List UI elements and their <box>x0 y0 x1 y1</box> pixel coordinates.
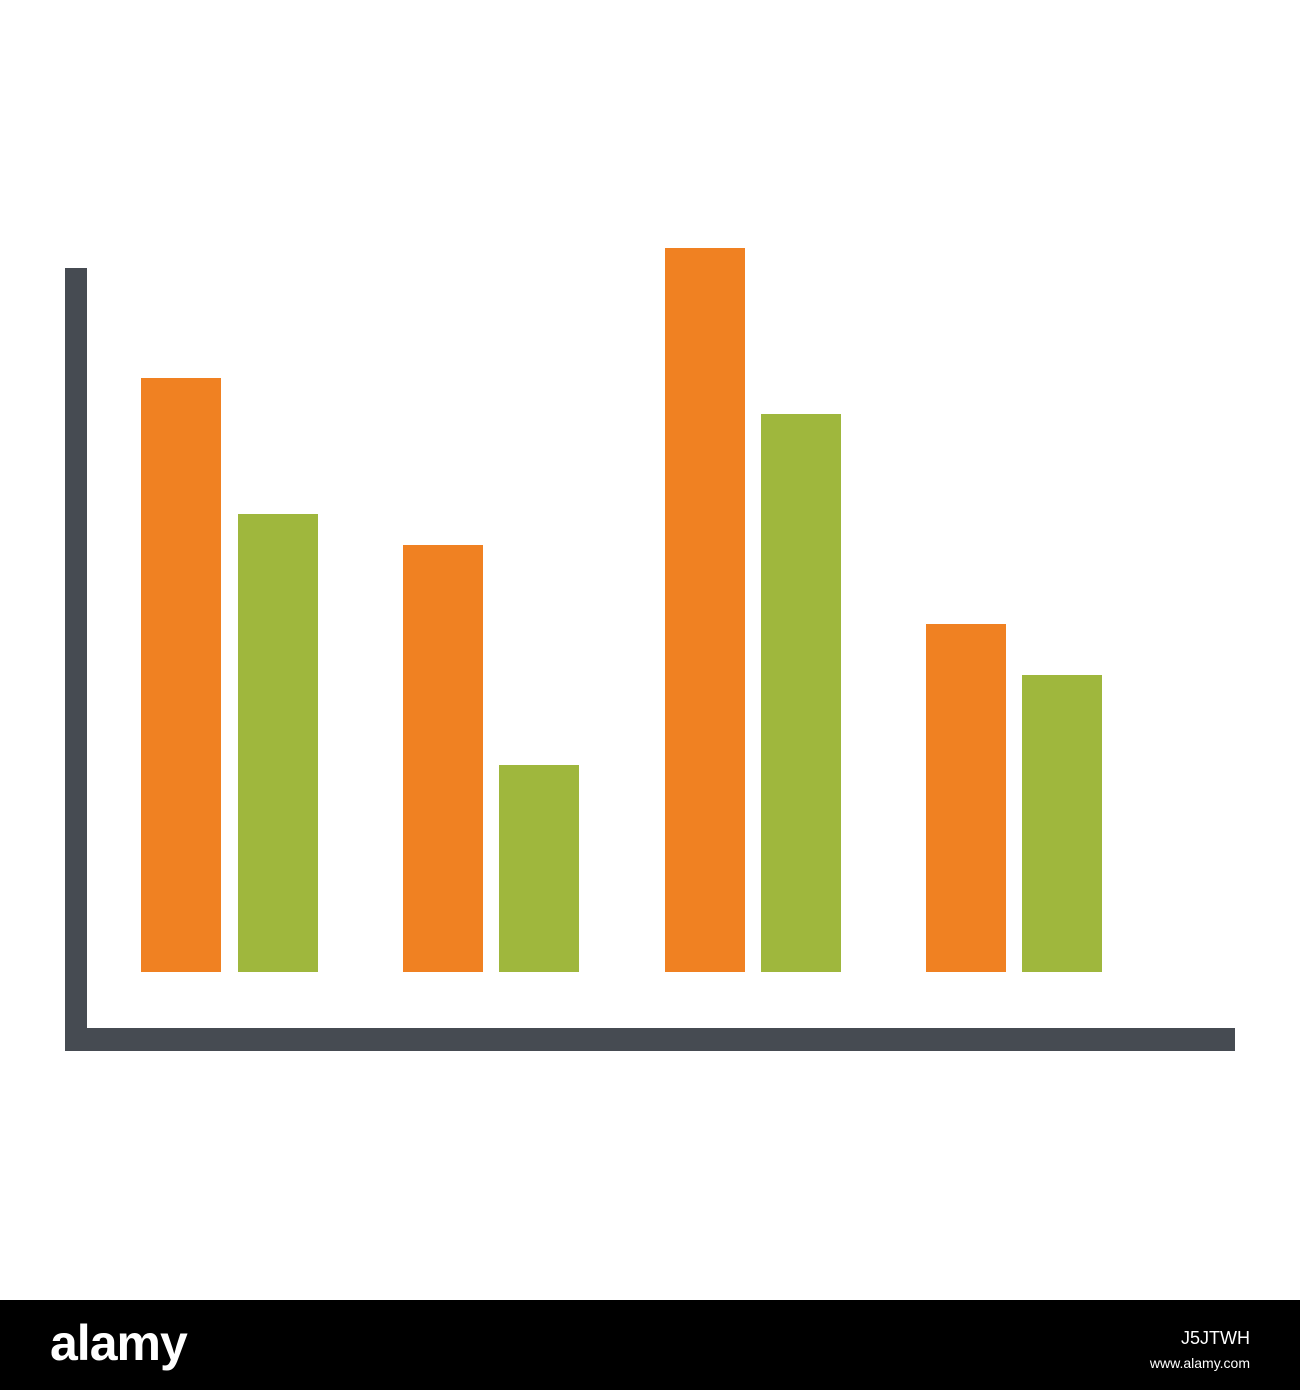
footer image id: J5JTWH <box>1181 1328 1250 1348</box>
footer logo text: alamy <box>50 1315 187 1371</box>
footer bar <box>0 1300 1300 1390</box>
bar: group 4 orange <box>926 624 1006 972</box>
bar: group 3 green <box>761 414 841 972</box>
footer image id <box>1150 1328 1250 1371</box>
bar: group 1 green <box>238 514 318 972</box>
footer image id: www.alamy.com <box>1150 1355 1250 1371</box>
bar chart <box>65 248 1235 1051</box>
x axis <box>65 1028 1235 1051</box>
y axis <box>65 268 87 1051</box>
bar: group 4 green <box>1022 675 1102 972</box>
bar: group 2 orange <box>403 545 483 972</box>
bar: group 1 orange <box>141 378 221 972</box>
bar: group 2 green <box>499 765 579 972</box>
bar: group 3 orange <box>665 248 745 972</box>
